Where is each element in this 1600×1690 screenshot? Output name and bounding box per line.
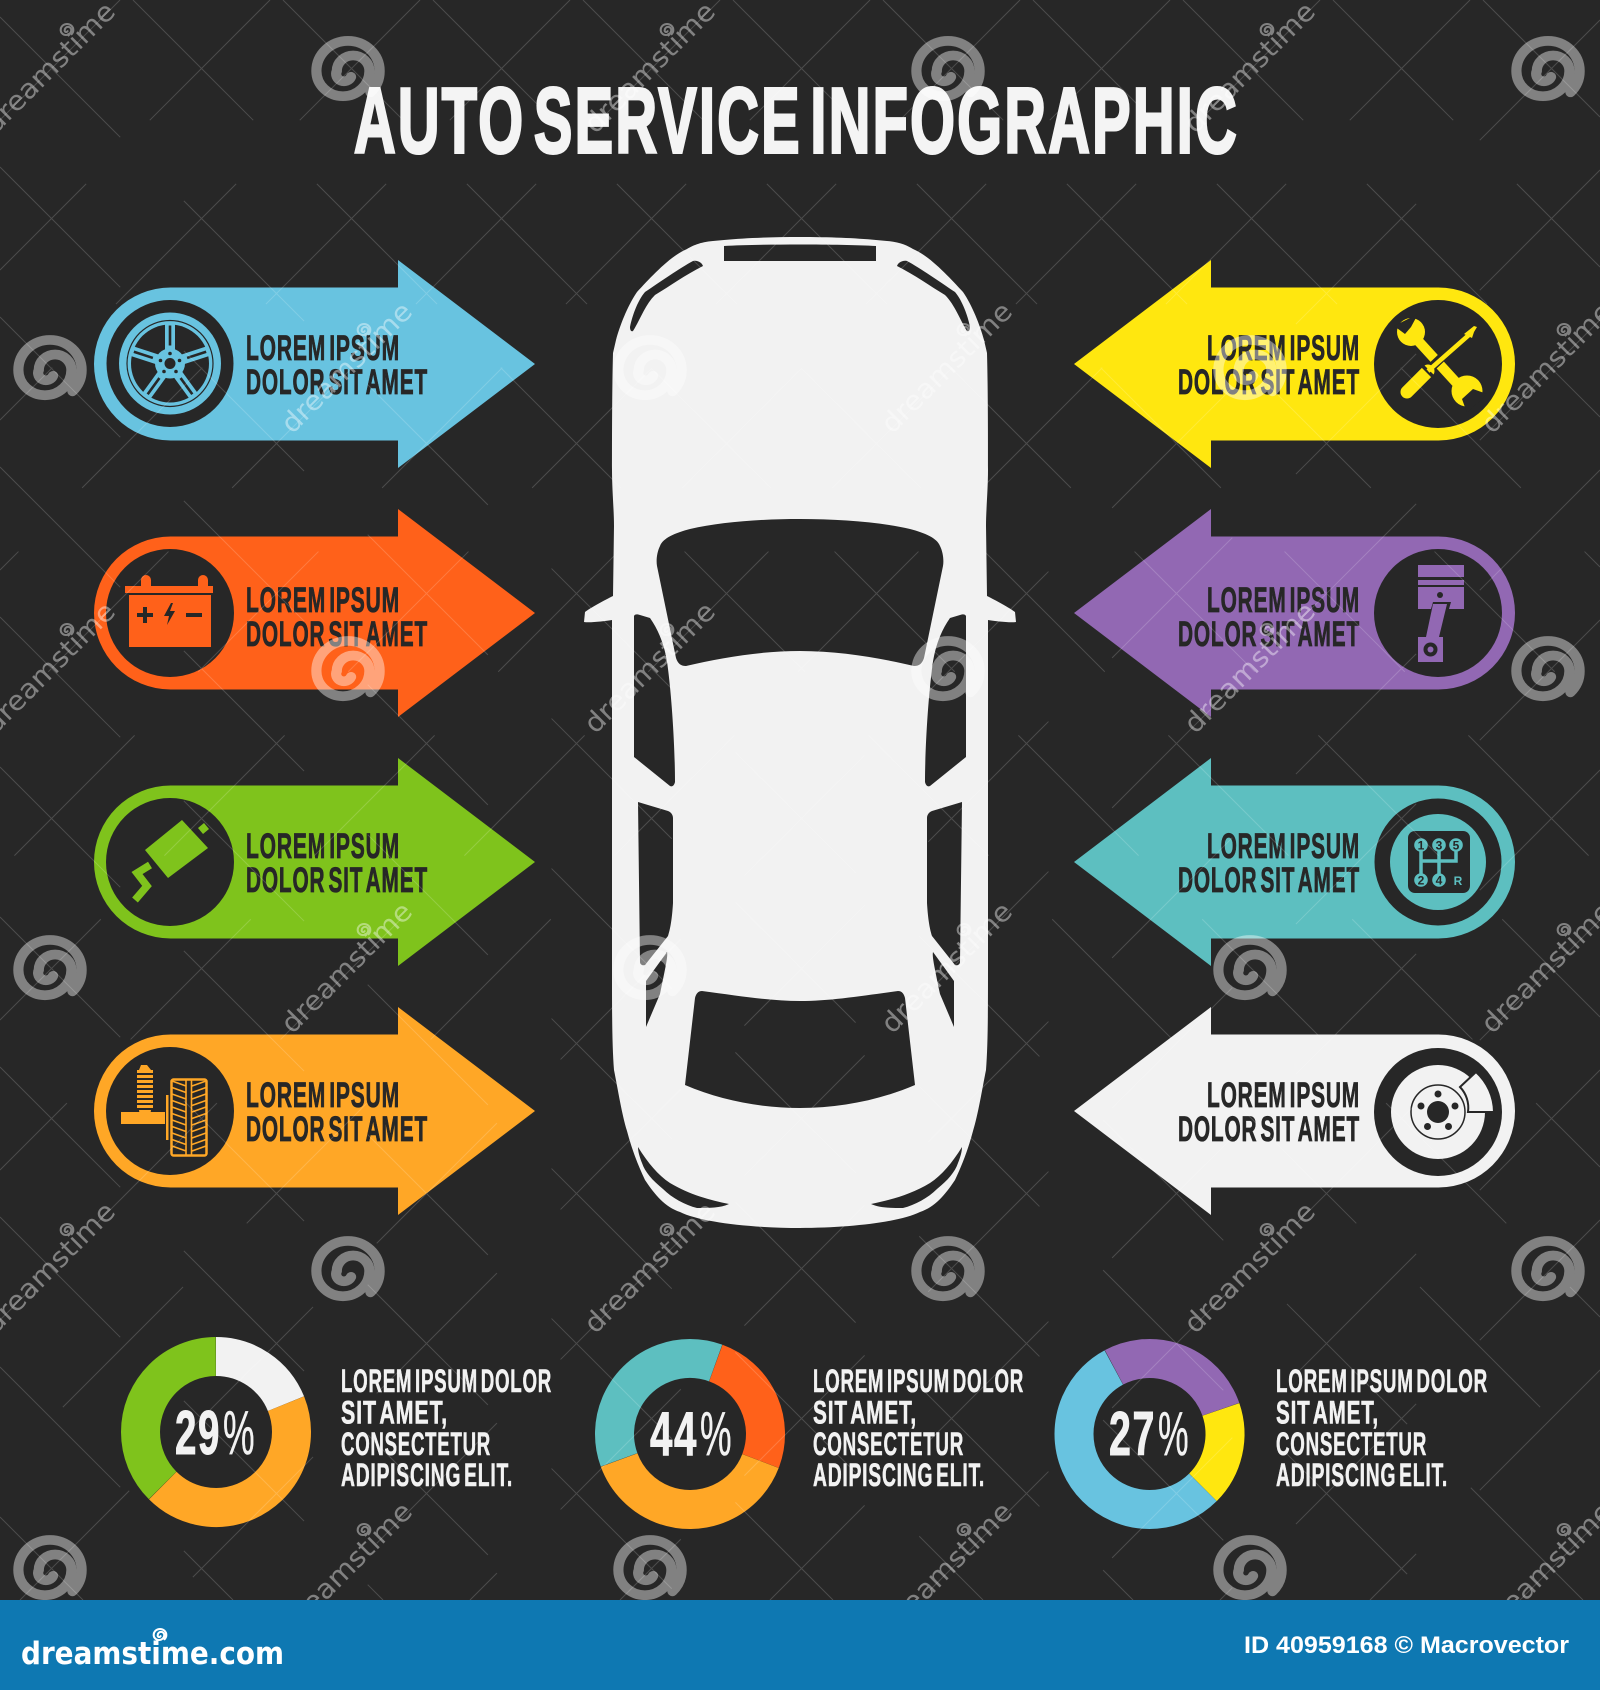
car top view (584, 237, 1016, 1228)
icon: exhaust muffler (106, 798, 234, 926)
text block: first donut: ADIPISCING ELIT. (341, 1457, 513, 1493)
label text: LOREM IPSUM (1207, 826, 1360, 866)
text block: first donut: SIT AMET, (341, 1394, 448, 1430)
label text: LOREM IPSUM (246, 580, 400, 620)
windshield (657, 519, 943, 666)
icon: gear shift: R (1454, 874, 1463, 888)
text block: second donut: SIT AMET, (813, 1394, 917, 1430)
text block: second donut (813, 1363, 1024, 1493)
label text: DOLOR SIT AMET (246, 860, 428, 900)
panel: piston arrow (1074, 509, 1515, 717)
icon: gear shift: 2 (1418, 873, 1425, 887)
side windows and lights, left (630, 261, 729, 1208)
panel: exhaust arrow (94, 758, 535, 966)
text block: second donut: LOREM IPSUM DOLOR (813, 1363, 1024, 1399)
text block: third donut (1276, 1363, 1488, 1493)
label text: DOLOR SIT AMET (246, 362, 428, 402)
footer image id: ID 40959168 © Macrovector (1244, 1632, 1569, 1659)
text block: third donut: CONSECTETUR (1276, 1426, 1427, 1462)
rear window (685, 991, 915, 1108)
icon: wrench and screwdriver (1374, 300, 1502, 428)
label text (246, 1075, 428, 1149)
icon: wheel (106, 300, 234, 427)
label text (1178, 826, 1360, 900)
front grille slot (724, 244, 876, 261)
label text (1178, 1075, 1360, 1149)
donut chart: 44% (592, 1336, 788, 1532)
icon: gear shift: 3 (1436, 838, 1443, 852)
label text: DOLOR SIT AMET (1178, 362, 1360, 402)
icon: suspension and tire (106, 1047, 234, 1175)
donut chart: 44%: % (700, 1400, 733, 1469)
label text: LOREM IPSUM (1207, 1075, 1360, 1115)
text block: third donut: SIT AMET, (1276, 1394, 1379, 1430)
panel: brake arrow (1074, 1007, 1515, 1215)
panel: gearbox arrow (1074, 758, 1515, 966)
label text: DOLOR SIT AMET (246, 614, 428, 654)
label text (1178, 328, 1360, 402)
icon: gear shift: 4 (1436, 873, 1443, 887)
donut chart: 29%: % (223, 1399, 256, 1468)
text block: first donut: CONSECTETUR (341, 1426, 491, 1462)
icon: gear shift (1374, 798, 1502, 926)
text block: second donut: ADIPISCING ELIT. (813, 1457, 985, 1493)
icon: gear shift: 1 (1418, 838, 1425, 852)
donut chart: 29%: 29 (175, 1399, 221, 1468)
panel: suspension arrow (94, 1007, 535, 1215)
donut chart: 27%: 27 (1109, 1400, 1156, 1469)
icon: gear shift: 5 (1453, 838, 1460, 852)
panel: wheel arrow (94, 260, 535, 468)
label text: DOLOR SIT AMET (246, 1109, 428, 1149)
label text (1178, 580, 1360, 654)
text block: second donut: CONSECTETUR (813, 1426, 964, 1462)
label text (246, 826, 428, 900)
donut chart: 29% (109, 1325, 323, 1539)
donut chart: 27%: % (1158, 1400, 1190, 1469)
label text: DOLOR SIT AMET (1178, 614, 1360, 654)
label text: LOREM IPSUM (1207, 328, 1360, 368)
text block: first donut (341, 1363, 552, 1493)
label text: LOREM IPSUM (1207, 580, 1360, 620)
label text: LOREM IPSUM (246, 826, 400, 866)
footer logo swirl (154, 1629, 166, 1640)
label text: DOLOR SIT AMET (1178, 1109, 1360, 1149)
footer bar (0, 1600, 1600, 1690)
label text: DOLOR SIT AMET (1178, 860, 1360, 900)
label text: LOREM IPSUM (246, 1075, 400, 1115)
label text: LOREM IPSUM (246, 328, 400, 368)
donut chart: 27% (1043, 1327, 1256, 1541)
label text (246, 328, 428, 402)
panel: tools arrow (1074, 260, 1515, 468)
panel: battery arrow (94, 509, 535, 717)
icon: battery (106, 549, 234, 677)
icon: brake disc (1374, 1048, 1502, 1176)
label text (246, 580, 428, 654)
donut chart: 44%: 44 (650, 1400, 698, 1469)
footer site name: dreamstime.com (21, 1636, 284, 1672)
text block: first donut: LOREM IPSUM DOLOR (341, 1363, 552, 1399)
icon: piston (1374, 549, 1502, 677)
side windows and lights, right (871, 261, 970, 1208)
text block: third donut: ADIPISCING ELIT. (1276, 1457, 1448, 1493)
